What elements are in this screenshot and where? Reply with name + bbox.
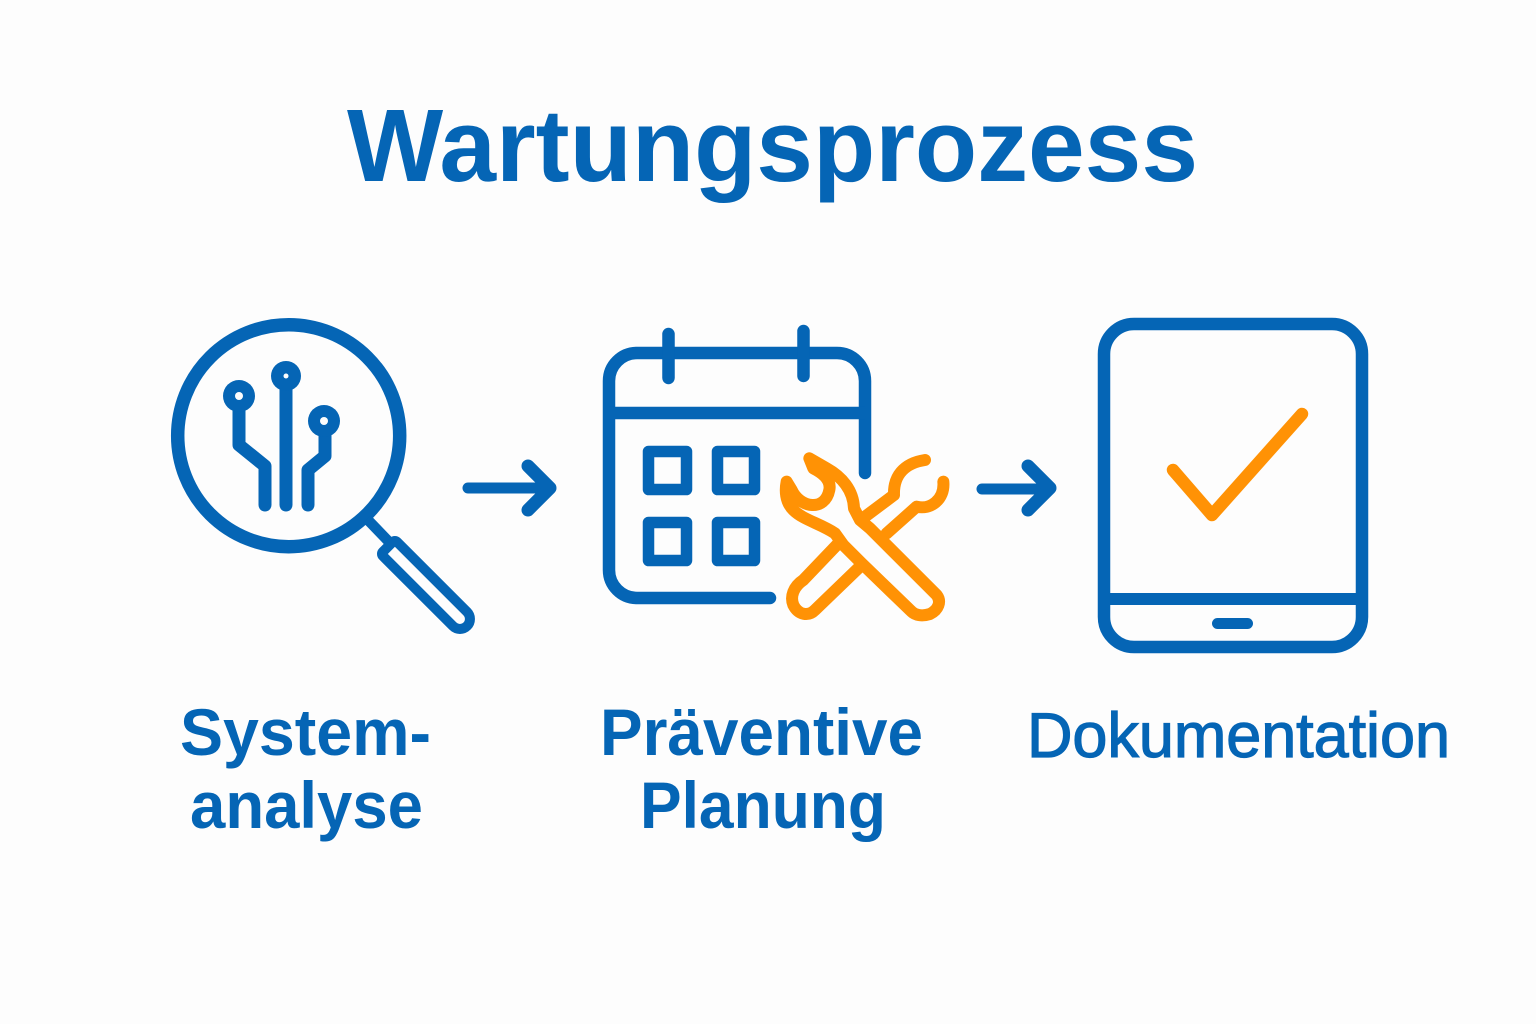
label: Präventive Planung: Präventive <box>600 695 923 769</box>
magnifier lens <box>178 325 400 547</box>
magnifier neck <box>367 519 392 545</box>
label: Systemanalyse: analyse <box>190 768 423 842</box>
step 2: preventive planning <box>600 331 943 842</box>
calendar day grid <box>648 452 754 560</box>
tablet body <box>1104 324 1362 647</box>
step 3: documentation <box>1027 324 1450 771</box>
tablet bezel line <box>1104 593 1362 605</box>
label: Systemanalyse <box>180 695 431 842</box>
tablet home button <box>1212 618 1253 629</box>
icon: magnifying glass with circuit <box>178 325 474 633</box>
label: Präventive Planung <box>600 695 923 842</box>
checkmark <box>1173 414 1302 515</box>
step 1: system analysis <box>178 325 474 842</box>
arrow 2 <box>982 466 1050 510</box>
title: Wartungsprozess <box>347 88 1198 203</box>
icon: crossed wrench and spanner <box>786 458 943 615</box>
icon: tablet with checkmark <box>1104 324 1362 647</box>
label: Dokumentation: Dokumentation <box>1027 701 1450 771</box>
icon: calendar with tools <box>609 331 943 615</box>
arrow 1 <box>468 466 550 510</box>
calendar header line <box>609 407 865 419</box>
calendar rings <box>668 331 804 378</box>
circuit traces <box>223 361 340 505</box>
label: Präventive Planung: Planung <box>640 768 886 842</box>
label: Systemanalyse: System- <box>180 695 431 769</box>
calendar frame <box>609 353 865 598</box>
magnifier handle <box>381 540 474 633</box>
